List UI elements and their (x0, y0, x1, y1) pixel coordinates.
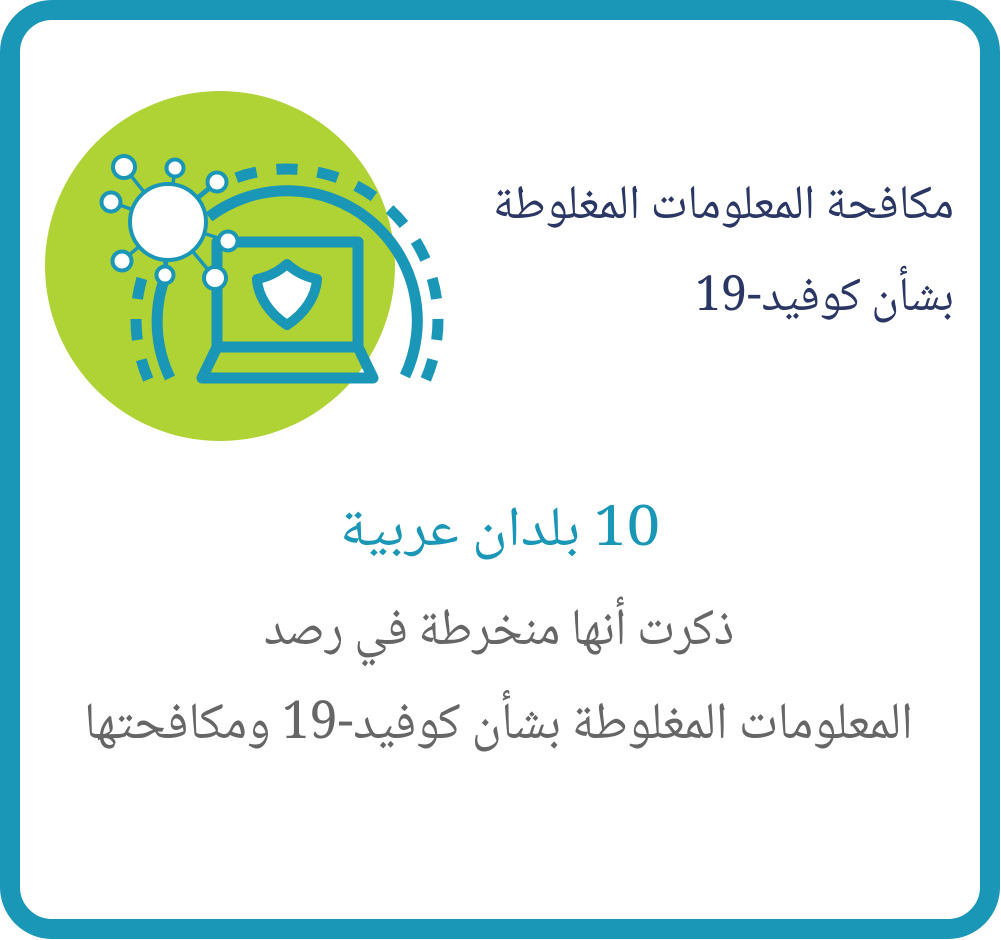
statistic: 10 Arab countries: 10 بلدان عربية (340, 485, 660, 581)
solid inner arc (157, 191, 417, 378)
green background circle (45, 91, 395, 441)
icon: laptop with shield and virus (45, 91, 500, 533)
virus nodes (102, 156, 238, 289)
shield (257, 264, 317, 325)
virus spikes (111, 167, 228, 278)
heading line 1: مكافحة المعلومات المغلوطة (493, 168, 954, 249)
dashed outer arc (74, 107, 500, 533)
description line 2: المعلومات المغلوطة بشأن كوفيد-19 ومكافحتها (84, 682, 913, 771)
heading (493, 168, 954, 341)
description (84, 588, 913, 771)
heading line 2: بشأن كوفيد-19 (695, 260, 954, 341)
laptop (202, 242, 373, 378)
description line 1: ذكرت أنها منخرطة في رصد (264, 588, 734, 677)
